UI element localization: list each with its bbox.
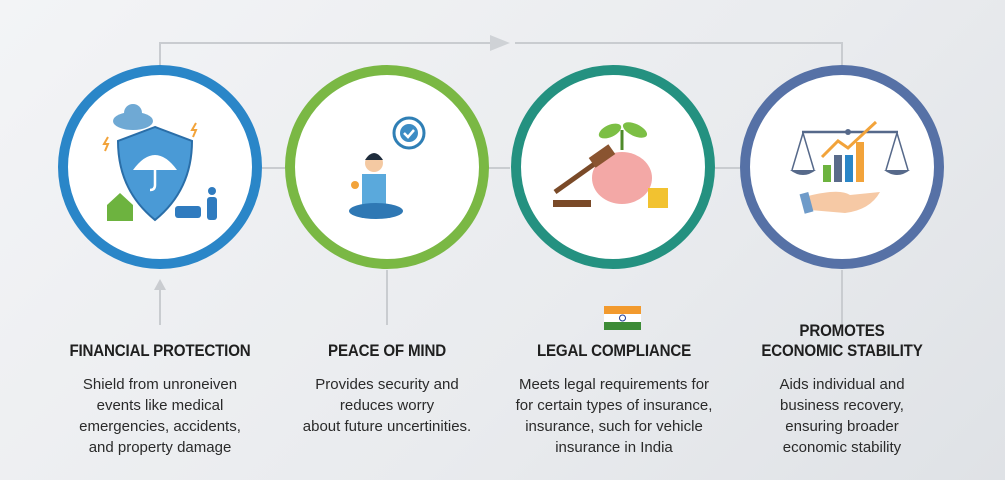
text: legal compliance: for certain types of insurance, <box>516 397 712 414</box>
text: peace of mind: reduces worry <box>340 397 434 414</box>
icon: house <box>107 193 133 221</box>
text: financial protection: events like medical <box>97 397 223 414</box>
icon: hand <box>808 192 880 213</box>
icon: piggy bank <box>592 152 652 204</box>
text: peace of mind: Provides security and <box>315 376 459 393</box>
text: financial protection: Shield from unroneiven <box>83 376 237 393</box>
text: economic stability: ECONOMIC STABILITY <box>761 341 923 360</box>
icon: meditating person <box>365 154 383 172</box>
arrow: top <box>490 35 510 51</box>
icon: plant <box>620 130 624 150</box>
text: economic stability <box>761 321 923 456</box>
icon: cloud <box>113 112 153 130</box>
text: economic stability: economic stability <box>783 439 901 456</box>
circle: legal compliance <box>516 70 710 264</box>
text: legal compliance <box>516 341 712 456</box>
text: financial protection: emergencies, accidents, <box>79 418 241 435</box>
icon: bar chart <box>823 165 831 182</box>
text: legal compliance: insurance, such for vehicle <box>525 418 703 435</box>
text: peace of mind: PEACE OF MIND <box>328 341 446 360</box>
connector lines <box>160 43 842 325</box>
icon: person <box>208 187 216 195</box>
text: legal compliance: Meets legal requirements for <box>519 376 709 393</box>
icon: check bubble <box>394 118 424 148</box>
text: financial protection <box>69 341 251 456</box>
icon: shield with umbrella <box>118 127 192 220</box>
icon: India flag <box>604 306 641 330</box>
icon: scale <box>802 131 898 133</box>
text: legal compliance: LEGAL COMPLIANCE <box>537 341 691 360</box>
icon: gavel <box>555 160 600 192</box>
text: economic stability: PROMOTES <box>799 321 885 340</box>
text: economic stability: Aids individual and <box>779 376 905 393</box>
text: financial protection: FINANCIAL PROTECTION <box>69 341 251 360</box>
text: peace of mind <box>303 341 471 435</box>
circle: financial protection <box>63 70 257 264</box>
arrow: up under circle 1 <box>154 279 166 290</box>
circle: economic stability <box>745 70 939 264</box>
icon: car <box>175 206 201 218</box>
icon: coins <box>648 188 668 208</box>
text: economic stability: business recovery, <box>780 397 904 414</box>
text: peace of mind: about future uncertinities. <box>303 418 471 435</box>
text: legal compliance: insurance in India <box>555 439 673 456</box>
text: financial protection: and property damage <box>89 439 231 456</box>
text: economic stability: ensuring broader <box>785 418 899 435</box>
circle: peace of mind <box>290 70 484 264</box>
